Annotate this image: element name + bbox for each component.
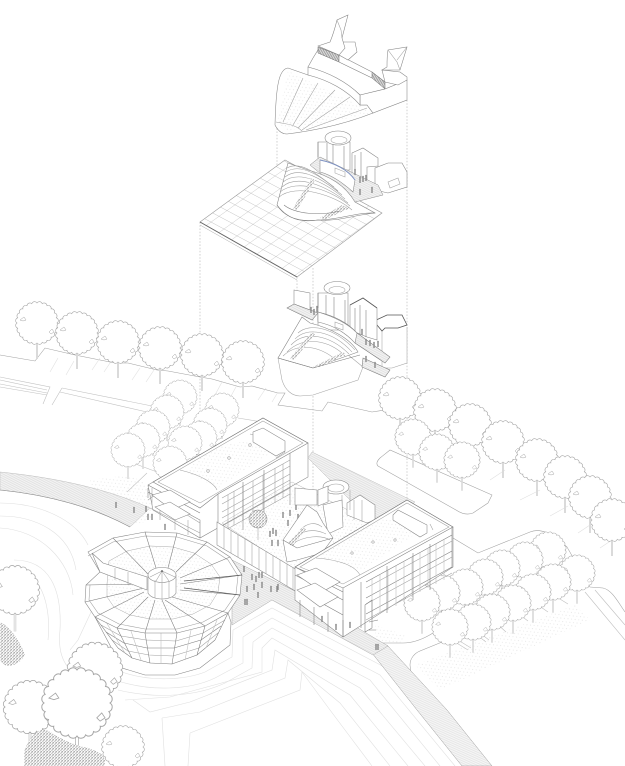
- right building south-east facade: [343, 527, 452, 637]
- left building east facade: [218, 453, 290, 532]
- right building west balconies: [295, 567, 351, 637]
- tree grove: behind left building: [111, 380, 239, 492]
- round pavilion: [85, 532, 242, 675]
- courtyard tree: [249, 510, 267, 540]
- upper roads and parking edge: [0, 348, 625, 766]
- tier 3: auditorium with bowl: [278, 282, 407, 396]
- promenade band: [0, 472, 492, 766]
- pavilion roof: [85, 532, 242, 633]
- plaza figures: [115, 502, 379, 667]
- right skylight tower: [382, 47, 407, 85]
- stippled ground: [90, 475, 590, 690]
- pavilion base: [95, 613, 231, 675]
- left building: [148, 418, 308, 538]
- hatched parapets: [318, 47, 385, 89]
- courtyard: [217, 452, 415, 592]
- courtyard figures: [269, 504, 299, 546]
- tier 2: grid plane and auditorium: [200, 131, 407, 280]
- tree row: east parking: [379, 377, 625, 556]
- courtyard wall: [217, 522, 297, 592]
- tree grove: south east: [404, 532, 595, 658]
- terrain: lake contours: [0, 503, 470, 766]
- south west trees: [0, 565, 144, 766]
- tier 2 rotunda and walls: [318, 131, 407, 193]
- pavilion cut-out wall: [92, 553, 147, 590]
- tier 2 seating bowl: [277, 163, 375, 221]
- tier 3 seating fan: [278, 317, 360, 368]
- tier 1: roof shell: [275, 15, 407, 134]
- tier 3 stage wall and deck: [318, 312, 390, 377]
- pavilion facade: [95, 613, 228, 664]
- pavilion central drum: [148, 568, 176, 600]
- right building roof: [295, 500, 453, 588]
- tree row: north parking: [16, 302, 264, 398]
- tier 2 stage deck and blue wall: [310, 157, 383, 202]
- tier 2 grid plane: [200, 160, 382, 280]
- dashed projection lines: [200, 100, 407, 512]
- right building: [295, 500, 453, 637]
- tier 3 back walls: [318, 282, 377, 340]
- left building balconies: [148, 485, 200, 538]
- left building roof: [153, 418, 308, 508]
- roof fan: [275, 68, 373, 134]
- tier 3 right rotunda: [372, 315, 407, 368]
- tier 3 bowl shell: [278, 317, 363, 396]
- dense tree canopies: [0, 622, 105, 766]
- courtyard theatre model: [283, 480, 375, 562]
- parking island: [377, 450, 492, 514]
- tier 3 left screen and deck: [287, 290, 318, 320]
- roof band and block: [308, 50, 407, 113]
- left skylight tower: [318, 15, 357, 60]
